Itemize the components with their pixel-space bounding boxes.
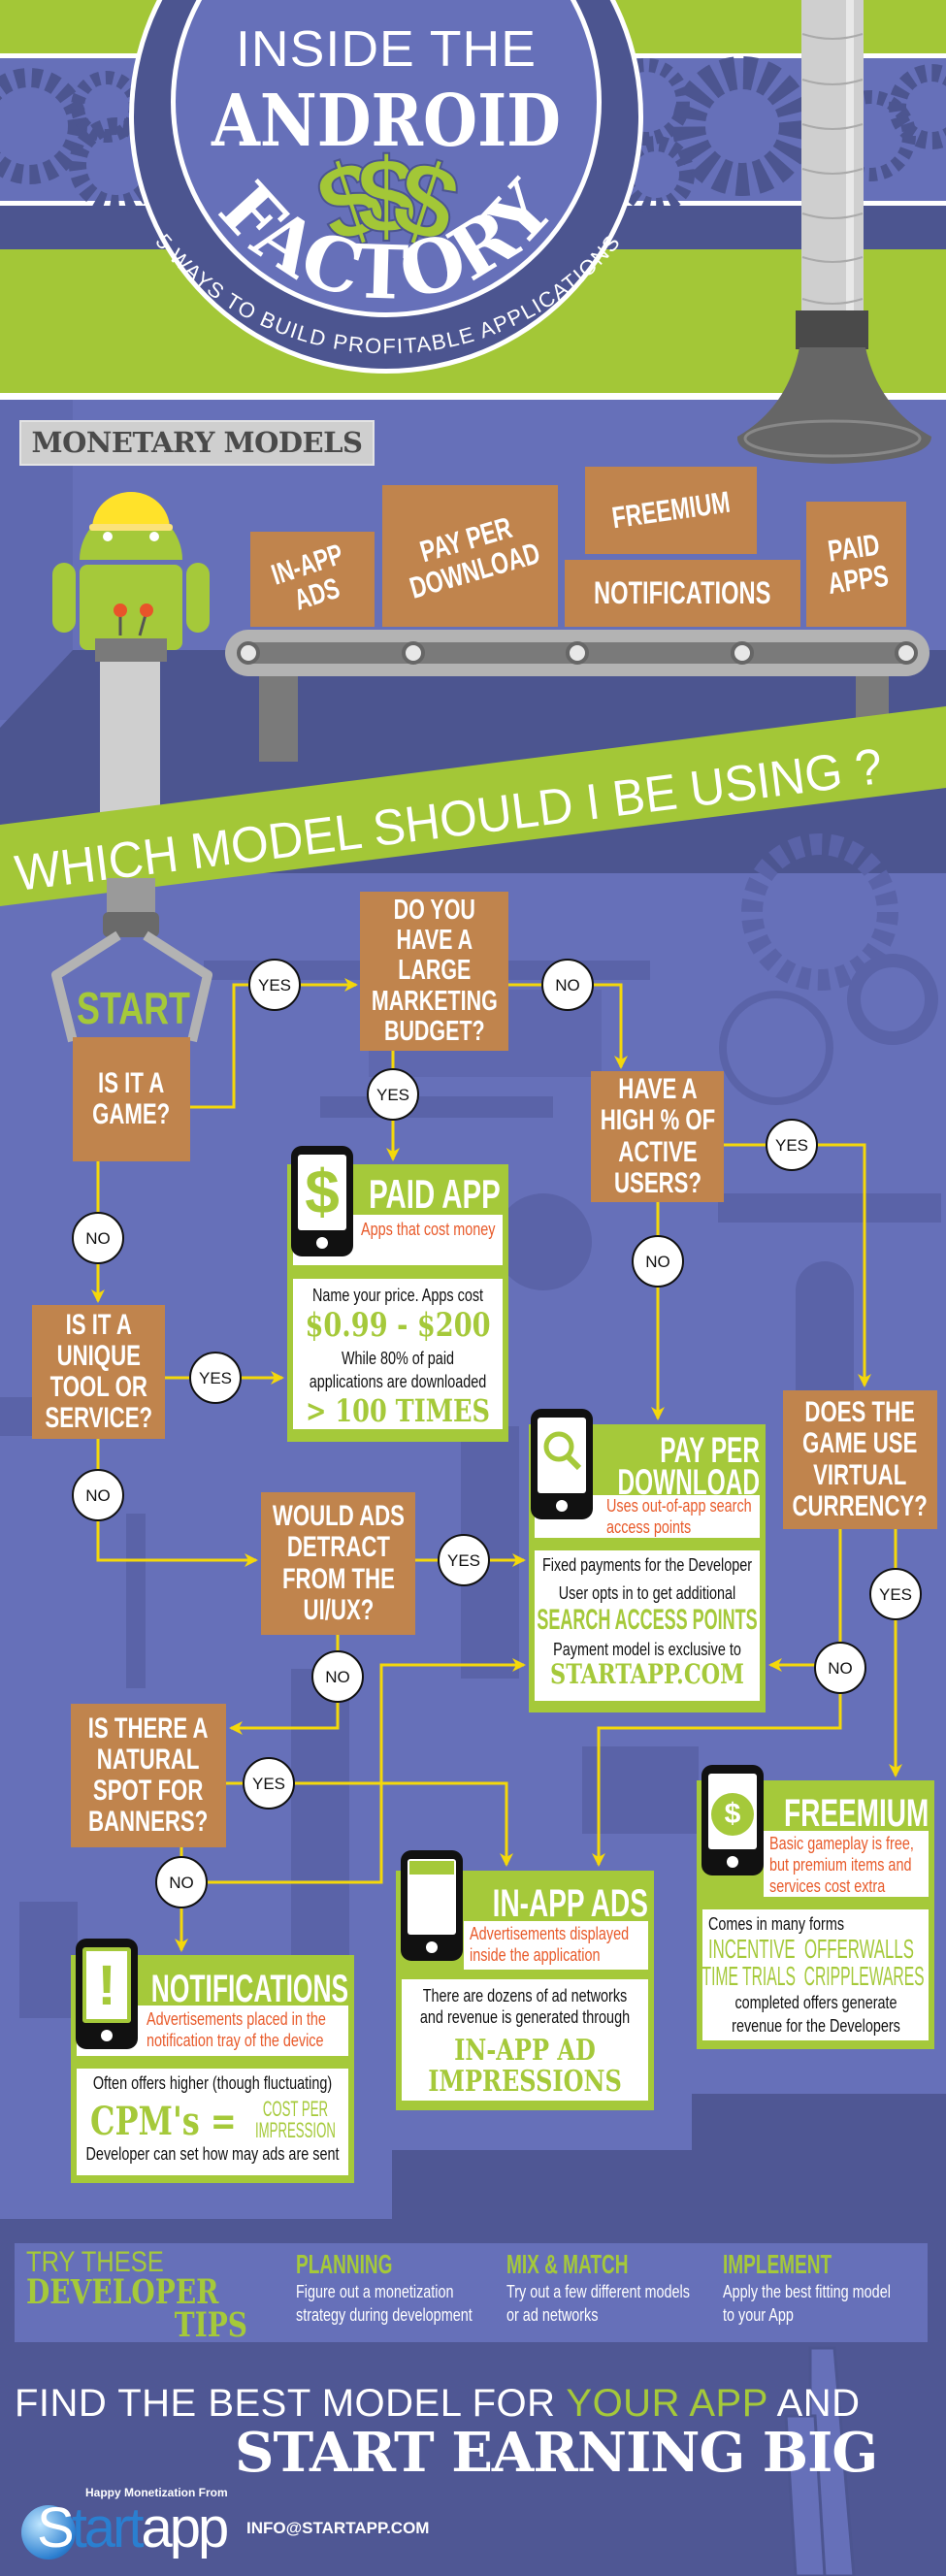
flow lines and yes/no circles: YES [199,1369,232,1387]
body: Payment model is exclusive to [553,1640,741,1659]
tip: implement: to your App [723,2305,794,2325]
subtitle: notification tray of the device [147,2031,324,2050]
body: TIME TRIALS CRIPPLEWARES [702,1961,925,1991]
box: freemium [585,467,757,554]
body [293,1279,503,1429]
sign: monetary models: MONETARY MODELS [32,426,362,459]
body: IMPRESSION [255,2118,336,2142]
question: active users: USERS? [613,1167,701,1199]
flow lines and yes/no circles: YES [258,976,291,995]
body: CPM's = [90,2099,237,2144]
subtitle: Apps that cost money [361,1220,495,1239]
tip: planning: Figure out a monetization [296,2282,454,2301]
box: paid apps: PAID [826,528,882,569]
subtitle [764,1831,929,1897]
logo: startapp: Startapp [37,2496,226,2560]
panel: freemium [697,1780,934,2049]
question: is it a game [73,1037,190,1161]
question: would ads detract: WOULD ADS [272,1500,405,1532]
body: INCENTIVE OFFERWALLS [708,1934,914,1964]
body: User opts in to get additional [559,1583,735,1603]
box: in-app ads [250,532,375,627]
body: revenue for the Developers [732,2016,899,2036]
body: IN-APP AD [454,2034,596,2068]
icon: dollars: $ [304,135,397,267]
icon: phone alert [76,1939,138,2049]
sign: monetary models [19,420,375,466]
subtitle: services cost extra [769,1876,885,1896]
badge circle [129,0,643,374]
title: DOWNLOAD [618,1462,760,1502]
icon: funnel pipe [737,0,931,464]
body: completed offers generate [734,1993,897,2012]
tip: mix and match [506,2249,690,2325]
body: SEARCH ACCESS POINTS [537,1604,758,1636]
tips heading: DEVELOPER [26,2272,218,2312]
box: freemium: FREEMIUM [609,484,732,535]
panel: in-app ads [396,1871,654,2110]
question: would ads detract: FROM THE [282,1562,394,1595]
box: paid apps: APPS [826,558,891,601]
flow lines and yes/no circles: NO [555,976,580,995]
question: active users [591,1071,724,1202]
question: natural spot [71,1704,226,1847]
question: active users: HIGH % OF [600,1104,715,1136]
body: applications are downloaded [310,1372,486,1391]
body [77,2069,348,2175]
tip: implement: Apply the best fitting model [723,2282,891,2301]
title: PAID APP [369,1171,501,1217]
question: virtual currency: GAME USE [802,1427,918,1459]
question: marketing budget [360,892,508,1051]
tips heading [26,2246,247,2345]
body: IMPRESSIONS [428,2065,622,2099]
body: Developer can set how may ads are sent [86,2144,339,2164]
body: Name your price. Apps cost [312,1286,483,1305]
subtitle [77,2005,348,2056]
icon: phone dollar [291,1146,353,1256]
closing line: FIND THE BEST MODEL FOR YOUR APP AND [15,2382,861,2425]
body: and revenue is generated through [420,2007,630,2027]
subtitle: 5 WAYS TO BUILD PROFITABLE APPLICATIONS [156,233,619,353]
flow lines and yes/no circles: YES [376,1086,409,1104]
title [618,1430,760,1502]
question: marketing budget: BUDGET? [384,1016,484,1047]
subtitle: Advertisements displayed [470,1924,629,1943]
question: unique tool: SERVICE? [45,1402,152,1434]
box: notifications [565,560,800,627]
subtitle: Basic gameplay is free, [769,1834,914,1853]
logo: startapp: Happy Monetization From [85,2486,228,2499]
title: inside the: INSIDE THE [236,21,537,78]
banner: which model: WHICH MODEL SHOULD I BE USING ? [12,738,886,902]
icon: claw with start [51,878,212,1042]
title: FREEMIUM [784,1792,929,1835]
question: marketing budget: LARGE [398,955,471,986]
tip: planning [296,2249,473,2325]
box: in-app ads: ADS [290,571,343,616]
body: Often offers higher (though fluctuating) [93,2073,332,2093]
icon: phone search [531,1409,593,1519]
tip: implement: IMPLEMENT [723,2249,832,2279]
icon: android worker [52,492,210,813]
subtitle: Advertisements placed in the [147,2009,326,2029]
question: unique tool: TOOL OR [49,1371,147,1403]
question: would ads detract [261,1492,415,1635]
flow lines and yes/no circles: NO [828,1659,853,1678]
subtitle: access points [606,1517,691,1537]
icon: phone dollar: $ [305,1157,340,1226]
tip: mix and match: MIX & MATCH [506,2249,629,2279]
box: pay per download [382,485,558,627]
panel: notifications [71,1955,354,2183]
conveyor belt with boxes [225,467,930,762]
body: Fixed payments for the Developer [542,1555,752,1575]
question: active users: ACTIVE [618,1135,697,1168]
flow lines and yes/no circles: NO [169,1874,194,1892]
question: unique tool: IS IT A [65,1309,132,1341]
question: is it a game: IS IT A [98,1067,165,1099]
flow lines and yes/no circles: NO [85,1486,111,1505]
box: notifications: NOTIFICATIONS [594,575,771,610]
panel: paid app [287,1164,508,1442]
question: natural spot: NATURAL [97,1744,200,1776]
panel: developer tips [15,2243,928,2342]
logo: startapp [21,2486,429,2560]
question: is it a game: GAME? [92,1098,171,1130]
panel: pay per download [529,1424,766,1712]
tip: planning: PLANNING [296,2249,392,2279]
subtitle: Uses out-of-app search [606,1496,752,1516]
box: paid apps [806,502,906,627]
subtitle: but premium items and [769,1855,911,1875]
question: marketing budget: MARKETING [372,986,497,1017]
body: $0.99 - $200 [305,1306,491,1345]
tip: planning: strategy during development [296,2305,473,2325]
body: There are dozens of ad networks [423,1986,627,2005]
question: would ads detract: DETRACT [286,1531,390,1563]
flow lines and yes/no circles: YES [775,1136,808,1155]
question: virtual currency: DOES THE [805,1396,915,1428]
question: unique tool [32,1305,165,1439]
question: natural spot: IS THERE A [88,1712,209,1745]
flow lines and yes/no circles: YES [879,1585,912,1604]
question: virtual currency [783,1390,937,1529]
icon: phone coin: $ [725,1798,740,1830]
box: pay per download: PAY PER [416,510,515,570]
subtitle [535,1495,760,1538]
icon: phone coin [701,1765,764,1875]
body: > 100 TIMES [306,1392,490,1429]
closing headline: START EARNING BIG [235,2421,877,2485]
body [702,1909,929,2040]
question: natural spot: SPOT FOR [93,1775,204,1807]
question: marketing budget: HAVE A [396,925,473,956]
icon: dollars: $ [356,137,416,256]
icon: phone banner [401,1850,463,1961]
title: IN-APP ADS [493,1882,648,1925]
icon: dollars: $ [379,135,473,267]
question: natural spot: BANNERS? [88,1806,209,1838]
logo: startapp: INFO@STARTAPP.COM [246,2519,429,2537]
box: in-app ads: IN-APP [268,538,347,591]
tip: implement [723,2249,891,2325]
subtitle [293,1215,503,1265]
body: COST PER [263,2097,328,2121]
icon: claw with start: START [77,983,190,1033]
question: virtual currency: CURRENCY? [793,1490,928,1522]
body: Comes in many forms [708,1914,844,1934]
body [535,1550,760,1701]
title: PAY PER [660,1430,760,1470]
box: pay per download: DOWNLOAD [406,536,543,605]
title: android: ANDROID [211,80,561,163]
title: NOTIFICATIONS [151,1968,348,2010]
header badge [129,0,643,374]
subtitle: inside the application [470,1945,600,1965]
body: While 80% of paid [342,1349,454,1368]
question: unique tool: UNIQUE [56,1340,141,1372]
tips heading: TRY THESE [26,2246,164,2278]
subtitle [464,1921,648,1970]
flow lines and yes/no circles: NO [85,1229,111,1248]
title: factory: FACTORY [217,175,549,299]
question: virtual currency: VIRTUAL [813,1459,907,1490]
body: STARTAPP.COM [550,1658,744,1690]
flow lines and yes/no circles: NO [645,1253,670,1271]
tip: mix and match: Try out a few different models [506,2282,690,2301]
question: active users: HAVE A [618,1073,697,1105]
question: marketing budget: DO YOU [393,895,475,926]
question: would ads detract: UI/UX? [303,1594,374,1626]
tips heading: TIPS [175,2305,247,2345]
icon: dollars [304,135,473,267]
flow lines and yes/no circles: NO [325,1668,350,1686]
flow lines and yes/no circles: YES [447,1551,480,1570]
body [402,1979,648,2101]
flow lines and yes/no circles: YES [252,1775,285,1793]
icon: phone alert: ! [97,1954,116,2017]
flow lines and yes/no circles [72,959,922,1952]
tip: mix and match: or ad networks [506,2305,598,2325]
